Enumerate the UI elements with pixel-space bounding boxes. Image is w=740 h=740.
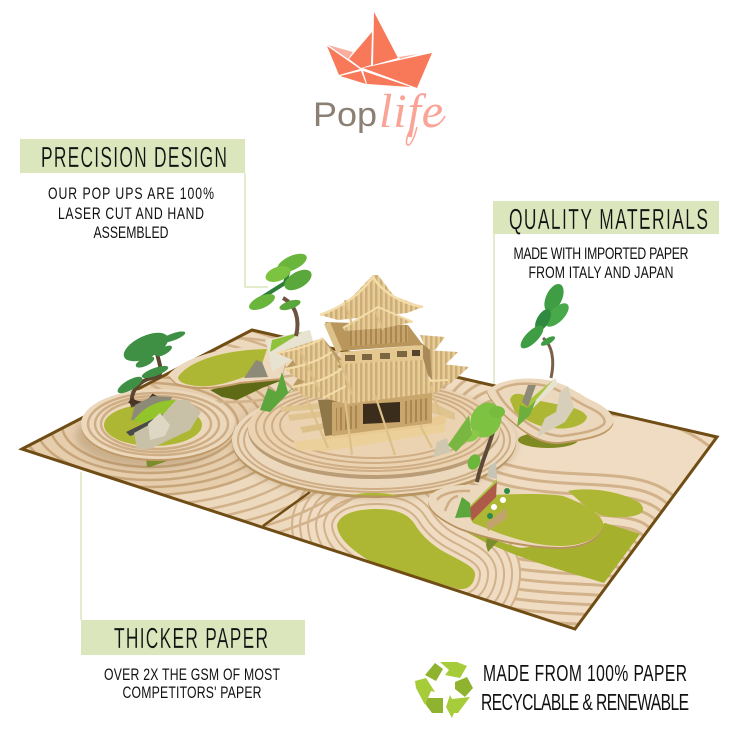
panel: central lower disc	[231, 385, 517, 499]
logo wordmark	[313, 85, 445, 145]
rings around lower lawn	[337, 509, 475, 589]
rings right side	[500, 430, 690, 470]
left tree	[115, 327, 186, 407]
pagoda ground floor	[318, 392, 432, 436]
badge: recyclable	[415, 661, 689, 718]
text: made from paper: RECYCLABLE & RENEWABLE	[481, 690, 689, 716]
icon: recycle arrows	[415, 662, 473, 718]
pagoda upper storey	[324, 322, 423, 354]
top right rocks	[517, 378, 574, 437]
callout: precision design: OUR POP UPS ARE 100%	[48, 185, 214, 204]
callout: thicker paper: OVER 2X THE GSM OF MOST	[104, 666, 280, 685]
rings left cluster	[26, 332, 354, 532]
rings top edge	[142, 331, 335, 402]
top right tree	[517, 281, 573, 378]
callout: quality materials	[493, 201, 719, 283]
card base with raked rings	[0, 300, 717, 629]
left rocks	[126, 396, 201, 449]
icon: paper boat	[327, 12, 432, 88]
callout: precision design: LASER CUT AND HAND	[58, 205, 204, 224]
panel: bottom right disc	[428, 485, 603, 552]
text: made from paper: MADE FROM 100% PAPER	[483, 661, 687, 687]
middle tree and red panel	[455, 397, 510, 531]
pagoda lower roof	[323, 380, 448, 404]
lawn sliver under disc	[353, 493, 398, 496]
callout: quality materials: QUALITY MATERIALS	[509, 204, 708, 236]
card border	[22, 330, 717, 629]
panel: top right disc	[487, 378, 613, 448]
pagoda struts	[300, 300, 440, 455]
panel: back left disc	[168, 347, 288, 400]
pagoda middle roof	[342, 358, 430, 392]
green lawn: right upper	[568, 489, 643, 517]
logo wordmark: life	[379, 85, 443, 138]
green lawn: right lower	[463, 523, 640, 583]
rocks and grass right of pagoda	[433, 415, 472, 457]
rocks and grass behind pagoda	[244, 330, 314, 412]
callout leader lines	[81, 173, 494, 620]
callout: precision design: PRECISION DESIGN	[41, 142, 227, 174]
back left tree	[247, 250, 315, 336]
callout: precision design: ASSEMBLED	[93, 224, 168, 243]
pagoda	[277, 275, 469, 455]
logo wordmark: Pop	[313, 96, 377, 134]
callout: thicker paper	[81, 620, 305, 703]
card fold	[263, 492, 310, 526]
pop-up card illustration	[0, 250, 717, 629]
callout: thicker paper: THICKER PAPER	[114, 623, 268, 655]
callout: precision design	[20, 139, 245, 243]
callout: quality materials: FROM ITALY AND JAPAN	[528, 264, 673, 283]
pagoda balcony	[340, 345, 423, 364]
green lawn: lower	[337, 509, 475, 589]
logo	[313, 12, 445, 145]
pagoda right eaves	[418, 335, 469, 384]
panel: central upper disc	[248, 381, 500, 479]
pagoda base platform	[280, 400, 455, 451]
pagoda left eaves	[277, 338, 347, 398]
callout: thicker paper: COMPETITORS' PAPER	[123, 684, 262, 703]
callout: quality materials: MADE WITH IMPORTED PAPER	[514, 245, 688, 264]
pagoda top roof	[320, 275, 423, 331]
text: made from paper	[481, 661, 689, 716]
panel: left disc	[76, 389, 235, 468]
